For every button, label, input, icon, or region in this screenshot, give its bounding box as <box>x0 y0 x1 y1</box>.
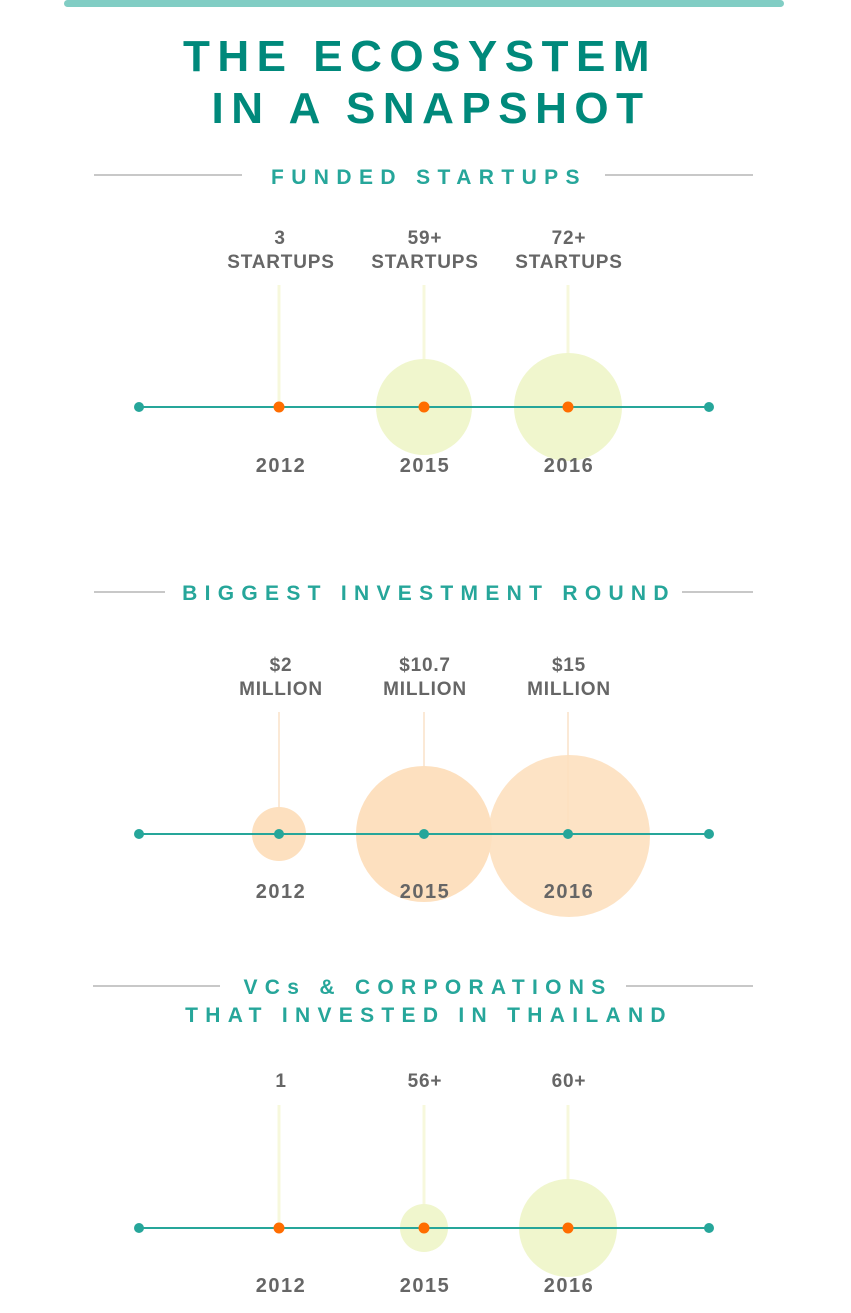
chart: VCs & corporations: 2015 <box>400 1275 450 1297</box>
chart: funded startups: 2012 <box>256 455 306 477</box>
top bar <box>64 0 784 7</box>
chart: VCs & corporations: 60+ <box>552 1071 586 1092</box>
chart: biggest investment round: 2016 <box>544 881 594 903</box>
chart: biggest investment round: MILLION <box>527 679 611 700</box>
chart: biggest investment round: $2 <box>270 655 292 676</box>
chart: funded startups: STARTUPS <box>371 252 479 273</box>
chart: funded startups: 2016 <box>544 455 594 477</box>
heading: biggest investment round: BIGGEST INVESTMENT ROUND <box>182 582 676 605</box>
chart: VCs & corporations: 1 <box>275 1071 287 1092</box>
chart: VCs & corporations <box>134 1071 714 1297</box>
chart: funded startups: STARTUPS <box>515 252 623 273</box>
heading: funded startups: FUNDED STARTUPS <box>271 166 587 189</box>
chart: biggest investment round: $15 <box>552 655 586 676</box>
chart: VCs & corporations: 2012 <box>256 1275 306 1297</box>
chart: funded startups <box>134 228 714 477</box>
chart: biggest investment round: MILLION <box>383 679 467 700</box>
chart: VCs & corporations: 2016 <box>544 1275 594 1297</box>
chart: funded startups: 72+ <box>552 228 586 249</box>
chart: biggest investment round: $10.7 <box>399 655 451 676</box>
title <box>183 32 657 133</box>
heading: VCs & corporations <box>93 976 753 1027</box>
chart: funded startups: 3 <box>274 228 286 249</box>
chart: funded startups: STARTUPS <box>227 252 335 273</box>
title: IN A SNAPSHOT <box>212 84 650 133</box>
chart: funded startups: 59+ <box>408 228 442 249</box>
heading: VCs & corporations: VCs & CORPORATIONS <box>243 976 613 999</box>
chart: biggest investment round <box>134 655 714 917</box>
title: THE ECOSYSTEM <box>183 32 657 81</box>
chart: biggest investment round: 2012 <box>256 881 306 903</box>
heading: VCs & corporations: THAT INVESTED IN THAILAND <box>185 1004 673 1027</box>
chart: biggest investment round: 2015 <box>400 881 450 903</box>
chart: VCs & corporations: 56+ <box>408 1071 442 1092</box>
chart: funded startups: 2015 <box>400 455 450 477</box>
chart: biggest investment round: MILLION <box>239 679 323 700</box>
